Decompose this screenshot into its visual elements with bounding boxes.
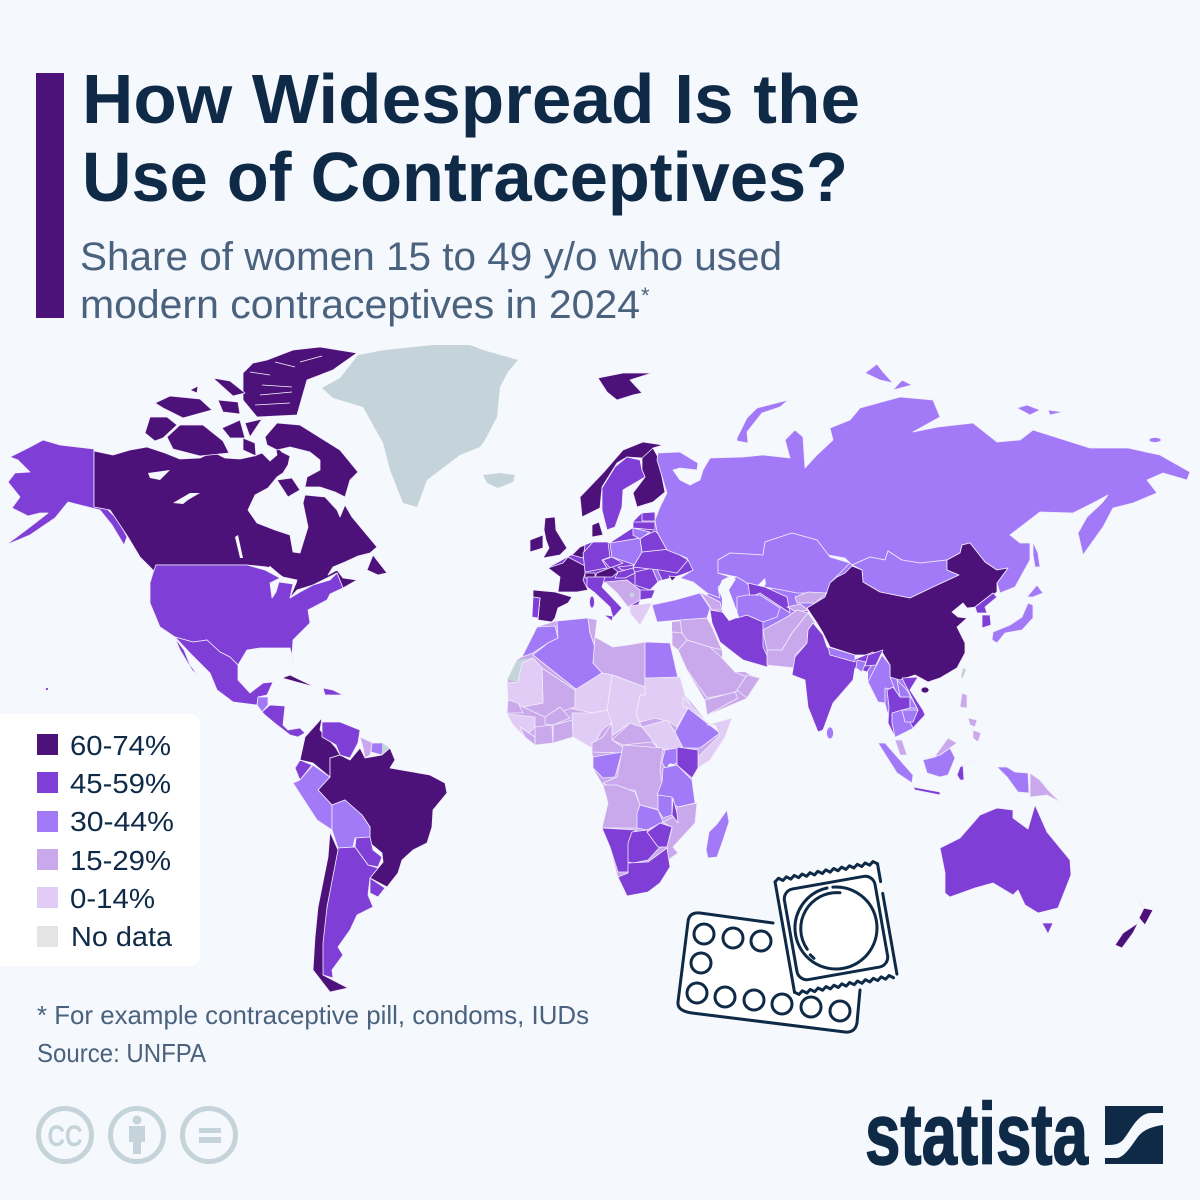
Mexico bbox=[175, 637, 273, 705]
Western Sahara bbox=[507, 658, 532, 682]
Chile bbox=[313, 832, 348, 992]
Borneo bbox=[923, 748, 955, 777]
Saudi Arabia bbox=[678, 640, 747, 698]
Belarus bbox=[640, 531, 670, 552]
Hainan bbox=[921, 687, 929, 693]
Sudan bbox=[636, 677, 692, 727]
Central African Republic bbox=[612, 723, 660, 750]
Mali bbox=[523, 668, 575, 717]
Balkans bbox=[605, 580, 640, 607]
Alaska bbox=[6, 440, 127, 545]
Denmark bbox=[592, 522, 603, 537]
Morocco bbox=[522, 626, 558, 657]
Kazakhstan bbox=[718, 533, 850, 593]
DR Congo bbox=[603, 745, 663, 810]
Sicily bbox=[604, 615, 613, 621]
Aral Sea bbox=[758, 578, 766, 592]
South Africa bbox=[618, 848, 670, 896]
Poland bbox=[610, 538, 642, 565]
Laos bbox=[897, 680, 917, 708]
Liberia bbox=[520, 727, 535, 745]
Thailand bbox=[887, 687, 910, 737]
Switzerland bbox=[585, 573, 595, 578]
Libya bbox=[593, 637, 645, 687]
Nigeria bbox=[572, 710, 612, 748]
Madagascar bbox=[706, 810, 729, 858]
Iraq and Syria bbox=[680, 618, 722, 650]
New Zealand bbox=[1115, 898, 1153, 948]
Estonia bbox=[642, 512, 655, 521]
legend item 45-59%: 45-59% bbox=[70, 768, 171, 799]
Niger bbox=[563, 673, 612, 713]
Cameroon bbox=[592, 723, 623, 753]
Caucasus bbox=[700, 592, 722, 610]
subtitle: * bbox=[641, 283, 650, 308]
Taiwan bbox=[961, 668, 966, 678]
Algeria bbox=[533, 618, 602, 690]
region: Southeast Asia and Oceania bbox=[878, 693, 1153, 948]
Mozambique bbox=[663, 803, 697, 860]
Chad bbox=[607, 675, 645, 735]
Cambodia bbox=[902, 710, 918, 722]
Crimea bbox=[669, 576, 676, 581]
subtitle: Share of women 15 to 49 y/o who used bbox=[80, 235, 782, 279]
Peru bbox=[293, 765, 332, 830]
Ghana bbox=[553, 720, 573, 743]
Sakhalin bbox=[1033, 542, 1040, 567]
Botswana bbox=[628, 830, 660, 863]
Sweden bbox=[602, 457, 645, 530]
West Papua bbox=[997, 767, 1029, 793]
Latvia bbox=[633, 522, 655, 530]
Colombia bbox=[300, 718, 340, 777]
Bulgaria bbox=[640, 590, 655, 600]
title: How Widespread Is the bbox=[82, 60, 860, 138]
Bolivia bbox=[332, 800, 370, 848]
Russian Arctic islands bbox=[865, 364, 1161, 442]
Central America bbox=[262, 705, 305, 737]
Tasmania bbox=[1042, 923, 1053, 934]
Bangladesh bbox=[856, 660, 866, 672]
Novaya Zemlya bbox=[737, 400, 788, 443]
Zimbabwe bbox=[647, 823, 672, 847]
Myanmar bbox=[868, 655, 895, 703]
Russia bbox=[655, 397, 1190, 598]
Senegal bbox=[507, 700, 523, 713]
France bbox=[548, 557, 588, 592]
Somalia bbox=[698, 718, 732, 768]
Guinea bbox=[507, 714, 535, 737]
Ukraine bbox=[633, 549, 688, 573]
subtitle: modern contraceptives in 2024 bbox=[80, 283, 640, 327]
Eritrea bbox=[683, 697, 707, 722]
Baja California bbox=[175, 638, 198, 675]
Newfoundland bbox=[367, 555, 387, 575]
source: Source: UNFPA bbox=[37, 1038, 207, 1068]
Java bbox=[913, 787, 940, 795]
Slovakia bbox=[618, 565, 635, 570]
Africa landmass bbox=[507, 618, 732, 896]
legend item 0-14% bbox=[37, 883, 155, 914]
Sumatra bbox=[878, 743, 913, 783]
statista logo: statista bbox=[865, 1086, 1088, 1183]
Caspian Sea bbox=[718, 577, 739, 621]
Zambia bbox=[637, 805, 663, 830]
region: Africa bbox=[507, 618, 732, 896]
Zambia east bbox=[658, 795, 672, 818]
Benelux bbox=[572, 545, 585, 558]
Angola bbox=[602, 785, 640, 828]
Iceland bbox=[483, 473, 515, 488]
Peninsular Malaysia bbox=[895, 740, 907, 755]
Guatemala bbox=[257, 697, 268, 712]
footnote: * For example contraceptive pill, condoms, IUDs bbox=[37, 1000, 589, 1030]
Uzbekistan bbox=[748, 583, 790, 613]
Mauritania bbox=[507, 658, 543, 707]
Greece bbox=[630, 603, 652, 625]
region: North America bbox=[6, 345, 518, 737]
Egypt bbox=[645, 642, 678, 678]
Turkey bbox=[652, 593, 710, 622]
United Kingdom bbox=[543, 517, 567, 558]
Afghanistan bbox=[763, 610, 808, 650]
icon: statista mark bbox=[1105, 1106, 1163, 1164]
Japan bbox=[992, 603, 1033, 643]
Vietnam bbox=[902, 677, 925, 728]
Italy bbox=[587, 577, 622, 618]
Pakistan bbox=[767, 613, 815, 668]
Jordan and Israel bbox=[672, 632, 687, 650]
Malawi bbox=[672, 798, 678, 823]
Tunisia bbox=[588, 618, 597, 647]
Lake Victoria bbox=[668, 764, 674, 770]
icon: creative commons licence bbox=[38, 1108, 236, 1162]
legend item 30-44%: 30-44% bbox=[70, 806, 174, 837]
Kenya bbox=[677, 747, 698, 778]
accent bar bbox=[36, 73, 64, 318]
title bbox=[82, 60, 860, 216]
Papua New Guinea bbox=[1030, 773, 1060, 802]
Germany bbox=[583, 542, 610, 572]
Philippines bbox=[960, 693, 981, 742]
legend item no data: No data bbox=[71, 921, 172, 952]
Czechia bbox=[603, 557, 623, 568]
world map bbox=[6, 345, 1190, 992]
Canadian lakes bbox=[148, 356, 322, 598]
Uganda bbox=[662, 748, 677, 768]
Cote d'Ivoire bbox=[535, 725, 553, 745]
Turkmenistan bbox=[737, 595, 780, 622]
Suriname bbox=[371, 743, 383, 755]
Svalbard bbox=[598, 373, 652, 400]
Middle East landmass bbox=[672, 618, 760, 715]
United States bbox=[150, 565, 343, 667]
Venezuela bbox=[322, 722, 360, 758]
North Korea bbox=[975, 593, 997, 613]
French Guiana bbox=[382, 743, 390, 755]
legend item 60-74%: 60-74% bbox=[70, 730, 171, 761]
Ethiopia bbox=[675, 708, 720, 748]
icon: condom wrapper bbox=[774, 861, 898, 995]
legend item 0-14%: 0-14% bbox=[70, 883, 155, 914]
Europe landmass bbox=[548, 512, 693, 607]
Mongolia bbox=[852, 551, 959, 598]
Hawaii bbox=[46, 688, 48, 690]
title: Use of Contraceptives? bbox=[82, 138, 848, 216]
legend item 15-29%: 15-29% bbox=[70, 845, 171, 876]
Arctic islands bbox=[145, 347, 358, 497]
Gabon and Congo bbox=[593, 752, 622, 778]
Tanzania bbox=[657, 765, 695, 807]
Northeast India bbox=[865, 650, 883, 666]
South Sudan bbox=[642, 720, 683, 750]
India bbox=[792, 623, 878, 732]
Central Asia landmass bbox=[707, 563, 852, 668]
Hispaniola bbox=[323, 688, 343, 695]
Oman bbox=[737, 675, 760, 698]
Portugal bbox=[532, 597, 540, 618]
Canada mainland bbox=[94, 445, 377, 598]
Moldova bbox=[652, 568, 662, 582]
Finland bbox=[633, 448, 665, 507]
Kyrgyzstan bbox=[795, 592, 827, 603]
China bbox=[807, 543, 1008, 682]
Hungary bbox=[615, 568, 635, 578]
legend bbox=[0, 714, 200, 966]
Kosovo bbox=[630, 592, 634, 598]
Austria bbox=[595, 567, 618, 577]
Hokkaido bbox=[1027, 585, 1043, 597]
Sri Lanka bbox=[826, 727, 834, 739]
South Korea bbox=[982, 615, 991, 628]
icon: cc: CC bbox=[48, 1120, 82, 1153]
Ecuador bbox=[295, 760, 312, 780]
Indochina landmass bbox=[868, 655, 925, 737]
Spain bbox=[533, 590, 572, 622]
Ireland bbox=[530, 535, 543, 552]
Yemen bbox=[705, 692, 738, 715]
subtitle bbox=[80, 235, 782, 327]
Nepal bbox=[828, 647, 855, 662]
Brazil bbox=[318, 748, 447, 887]
Sardinia bbox=[590, 596, 594, 608]
icon: pill blister pack bbox=[678, 913, 860, 1032]
Sulawesi bbox=[957, 758, 977, 780]
Romania bbox=[635, 568, 658, 590]
Namibia bbox=[602, 828, 637, 872]
Sabah and Sarawak bbox=[923, 738, 957, 759]
icon: no derivatives bbox=[182, 1108, 236, 1162]
icon: attribution bbox=[110, 1108, 164, 1162]
Guyana bbox=[360, 737, 373, 758]
region: Asia bbox=[652, 364, 1190, 739]
Australia bbox=[940, 805, 1071, 913]
Norway bbox=[580, 442, 663, 517]
Greenland bbox=[322, 345, 518, 507]
Iran bbox=[710, 610, 770, 667]
Argentina bbox=[322, 847, 383, 978]
icon: cc bbox=[38, 1108, 92, 1162]
Burkina Faso bbox=[545, 707, 570, 725]
region: Europe bbox=[530, 373, 693, 625]
Lithuania bbox=[633, 528, 650, 539]
Uruguay bbox=[370, 878, 385, 897]
Paraguay bbox=[355, 837, 382, 867]
Cuba bbox=[282, 675, 315, 687]
region: South America bbox=[293, 718, 447, 992]
Tajikistan bbox=[787, 604, 808, 612]
